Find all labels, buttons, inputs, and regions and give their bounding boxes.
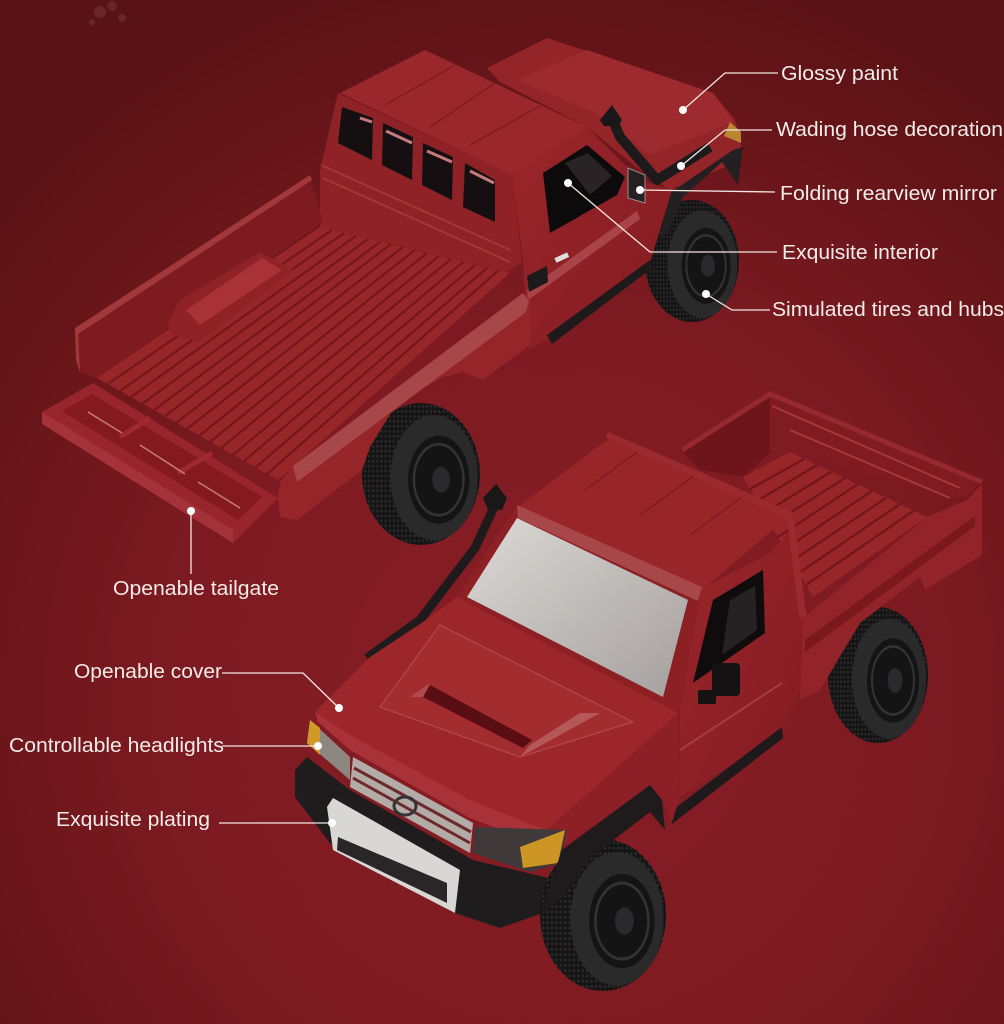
lower bed rail [682,394,982,482]
lower truck cab side [680,530,803,797]
upper truck side window [543,145,625,233]
emblem [394,797,416,815]
upper truck side sill [547,260,652,344]
tailgate ribs [120,418,212,473]
hood side vent highlight [520,713,600,757]
label: simulated tires and hubs: Simulated tires and hubs [772,298,1004,321]
door badge [554,252,569,263]
plated bumper [327,798,460,913]
upper truck snorkel [612,118,710,180]
label: simulated tires and hubs [702,290,1004,321]
bed far rail highlights [772,406,960,498]
label: wading hose decoration [677,118,1003,170]
lower truck snorkel [367,505,495,658]
label: wading hose decoration: Wading hose decoration [776,118,1003,141]
door crease [680,683,782,750]
right headlight [473,827,567,872]
snorkel head [600,105,622,126]
bed ribs [108,230,499,474]
lower bed side stripe [805,516,975,652]
decorative floral mark [89,1,126,25]
hood slot [423,685,532,748]
left headlight [307,720,350,780]
lower snorkel head [483,484,507,510]
bed right side panel [278,293,530,520]
upper truck amber indicator [724,122,741,143]
label: folding rearview mirror: Folding rearview mirror [780,182,997,205]
label: controllable headlights: Controllable headlights [9,734,224,757]
upper truck cab rear wall [320,93,522,272]
tailgate [42,383,278,543]
lower truck front flare [540,785,665,915]
lower truck: front view [295,393,982,991]
door stripe [527,211,640,300]
lower truck bed cab-side wall [680,393,770,477]
label: openable cover: Openable cover [74,660,222,683]
wheel housing hump [168,252,293,342]
lower truck hood [315,597,678,838]
upper truck rear wheel [362,403,480,545]
label: glossy paint [679,62,898,114]
upper truck mirror [628,168,645,203]
lower truck front wheel [540,839,666,991]
window glints [360,118,494,183]
bumper [295,757,557,928]
label: openable tailgate: Openable tailgate [113,577,279,600]
bed floor [97,227,510,480]
lower truck roof bar [607,435,803,617]
label: exquisite interior: Exquisite interior [782,241,938,264]
upper truck cab side [512,127,672,350]
lower truck bed floor [743,452,927,597]
label: glossy paint: Glossy paint [781,62,898,85]
label: exquisite plating: Exquisite plating [56,808,210,831]
lower truck roof [517,437,790,590]
side panel stripe [293,293,529,482]
lower bed ribs [750,459,913,585]
hood scoop [380,625,633,757]
label: openable tailgate [113,507,279,600]
label: folding rearview mirror [636,182,997,205]
grille [350,757,473,853]
upper truck: rear view [42,38,743,545]
upper truck hood [487,38,742,190]
lower truck mirror [698,663,740,704]
lower truck bed side [800,484,982,700]
label: exquisite interior [564,179,938,264]
upper truck front fender flare [660,147,743,237]
upper truck cab roof [340,50,587,175]
lower truck bed far wall [770,393,982,497]
windshield [467,518,688,697]
hood lip [315,712,547,842]
upper truck front wheel [645,200,739,322]
lower truck side window [693,570,765,683]
roll cage rear windows [338,107,495,222]
windshield frame [457,505,702,713]
lower fender panel [547,713,680,845]
bed left wall [75,177,323,378]
door handle [527,266,548,292]
lower truck rear wheel [828,607,928,743]
label: openable cover [74,660,343,712]
label: exquisite plating [56,808,336,831]
cage crossbar [321,165,510,262]
lower truck sill [670,727,783,824]
label: controllable headlights [9,734,322,757]
